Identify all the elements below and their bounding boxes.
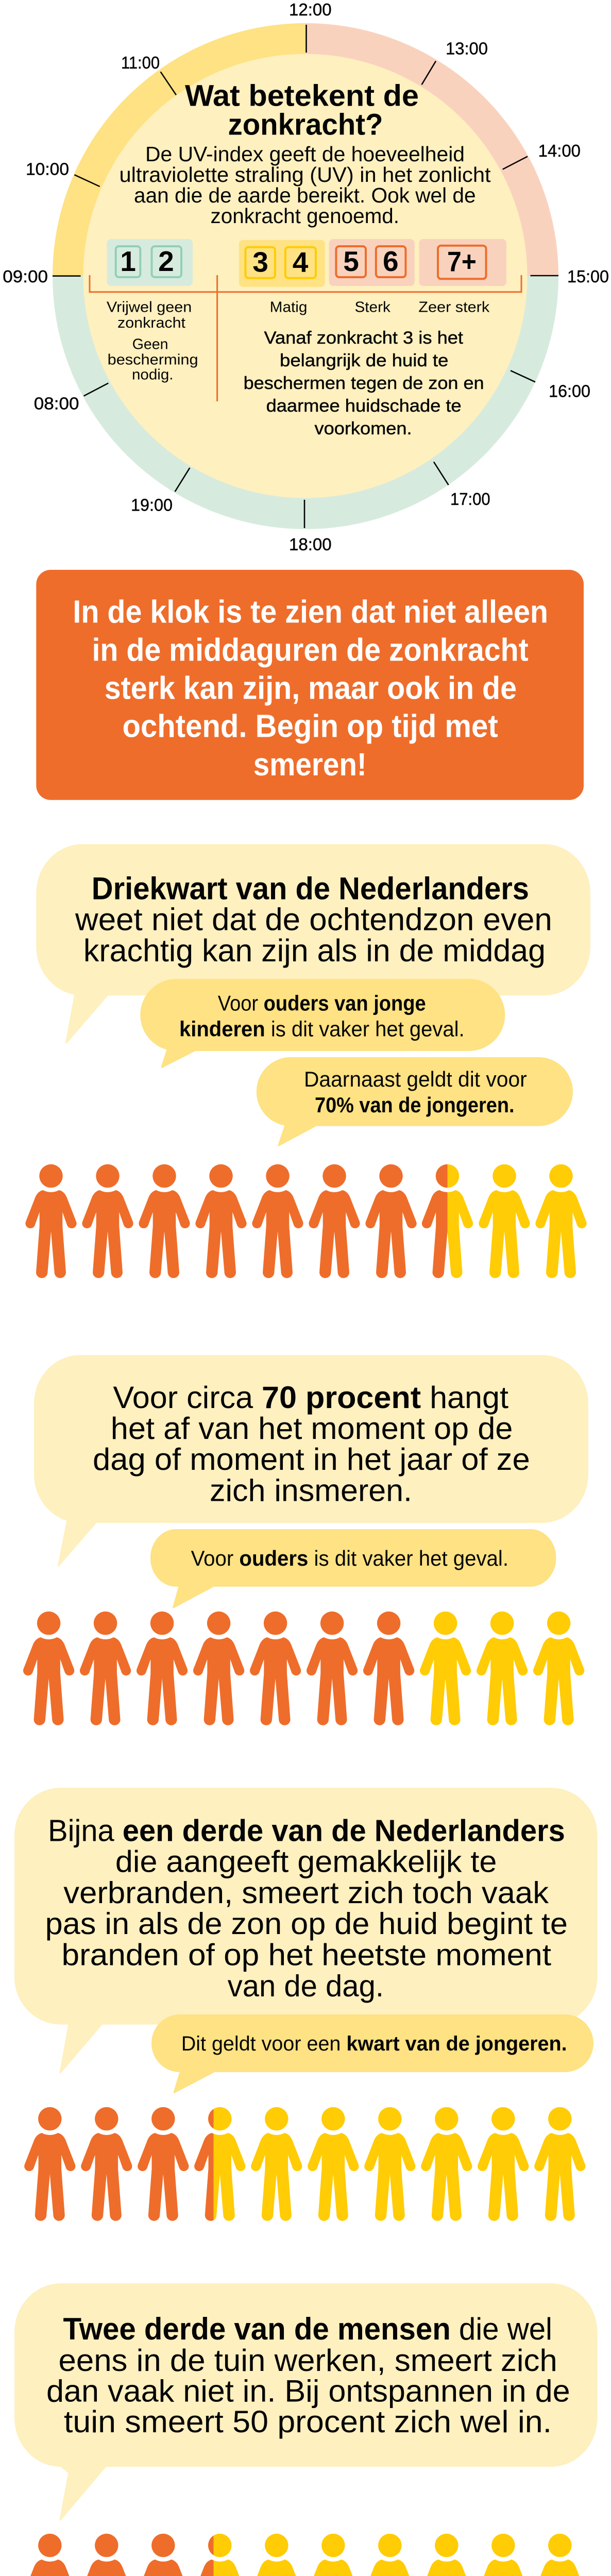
scale label: no protection: Geen [132,336,168,352]
UV scale: strong 5-6: 5 [343,245,359,277]
protection advice: daarmee huidschade te [266,396,462,416]
UV scale: moderate 3-4 [239,240,325,287]
protection advice: Vanaf zonkracht 3 is het [264,328,464,348]
speech bubble: gemakkelijk verbranden: branden of op het heetste moment [62,1938,551,1972]
speech bubble: moment op de dag [34,1355,588,1566]
speech bubble: kwart van de jongeren [151,2014,593,2093]
section 4: tuin [14,2283,598,2576]
hour labels: 19:00 [131,495,173,514]
hour labels: 18:00 [289,535,332,554]
clock ring: morning segment [53,23,306,276]
hour labels: 15:00 [567,267,609,286]
scale labels: moderate, strong, very strong: Matig [270,299,307,315]
speech bubble: gemakkelijk verbranden: die aangeeft gemakkelijk te [115,1845,497,1879]
UV scale: moderate 3-4: 3 [252,246,268,278]
UV scale: very strong 7+: 7+ [447,246,477,278]
UV scale: low 1-2: 2 [158,245,174,277]
speech bubble: ouders [150,1529,556,1607]
people row: 75 percent [25,1164,587,1278]
UV index explanation [120,142,491,228]
scale label: no protection: bescherming [108,351,198,368]
section 1: morning sun awareness [25,844,590,1278]
protection advice: belangrijk de huid te [280,351,448,370]
speech bubble: driekwart [36,844,590,1043]
orange callout: in de middaguren de zonkracht [92,633,529,668]
scale label: no protection [107,299,198,383]
section 3: een derde [14,1788,598,2221]
speech bubble: ouders van jonge kinderen [140,979,505,1067]
speech bubble: gemakkelijk verbranden: pas in als de zon op de huid begint te [45,1907,568,1941]
scale label: no protection: nodig. [132,367,173,383]
speech bubble: ouders van jonge kinderen: Voor ouders van jonge [218,991,426,1015]
clock heading: zonkracht? [228,108,383,141]
speech bubble: moment op de dag: Voor circa 70 procent hangt [113,1380,508,1415]
hour labels: 17:00 [450,489,490,509]
clock heading: Wat betekent de [185,79,419,113]
speech bubble: driekwart: krachtig kan zijn als in de middag [83,933,546,968]
UV index explanation: De UV-index geeft de hoeveelheid [145,142,465,166]
UV index explanation: ultraviolette straling (UV) in het zonlicht [120,163,491,187]
hour labels: 16:00 [549,382,590,401]
speech bubble: twee derde [14,2283,598,2520]
protection advice: voorkomen. [314,419,412,438]
clock ring: low UV segment [53,276,558,529]
speech bubble: twee derde: eens in de tuin werken, smeert zich [59,2343,557,2378]
speech bubble: moment op de dag: het af van het moment op de [111,1411,513,1446]
UV scale: very strong 7+ [419,239,506,286]
hour labels [3,0,609,554]
UV scale: strong 5-6: 6 [383,245,399,277]
speech bubble: gemakkelijk verbranden [14,1788,598,2073]
clock heading [185,79,419,141]
clock: UV index by hour [3,0,609,554]
scale labels: moderate, strong, very strong [270,299,490,315]
clock face [83,54,528,498]
UV scale: low 1-2: 1 [120,245,136,277]
orange callout: smeren! [253,747,367,783]
speech bubble: twee derde: tuin smeert 50 procent zich wel in. [64,2404,552,2439]
orange callout [36,570,584,800]
speech bubble: twee derde: Twee derde van de mensen die wel [63,2312,552,2346]
hour labels: 12:00 [289,0,332,19]
orange callout: ochtend. Begin op tijd met [123,709,498,744]
people row: two thirds garden [24,2534,585,2576]
speech bubble: ouders: Voor ouders is dit vaker het geval. [191,1546,508,1570]
orange callout: sterk kan zijn, maar ook in de [105,671,517,706]
speech bubble: 70% van de jongeren: Daarnaast geldt dit voor [304,1067,527,1091]
people row: 70 percent [23,1612,584,1725]
people row: one third [24,2107,585,2221]
speech bubble: moment op de dag: dag of moment in het jaar of ze [93,1442,530,1477]
orange callout: In de klok is te zien dat niet alleen [73,595,548,630]
hour ticks [53,25,558,528]
hour labels: 11:00 [121,53,160,72]
speech bubble: driekwart: weet niet dat de ochtendzon even [75,902,552,937]
scale label: no protection: Vrijwel geen [107,299,192,315]
speech bubble: driekwart: Driekwart van de Nederlanders [92,871,529,906]
speech bubble: gemakkelijk verbranden: van de dag. [228,1969,384,2003]
section 2: 70 procent [23,1355,588,1725]
hour labels: 09:00 [3,267,48,286]
speech bubble: 70% van de jongeren [257,1057,573,1145]
hour labels: 14:00 [538,141,581,160]
scale bracket [90,275,521,401]
speech bubble: 70% van de jongeren: 70% van de jongeren. [315,1093,514,1117]
speech bubble: gemakkelijk verbranden: Bijna een derde van de Nederlanders [48,1814,565,1848]
UV scale: low 1-2 [107,239,193,286]
hour labels: 08:00 [34,394,79,413]
UV scale: strong 5-6 [329,239,415,286]
hour labels: 10:00 [26,159,69,178]
speech bubble: ouders van jonge kinderen: kinderen is dit vaker het geval. [179,1017,465,1041]
protection advice: beschermen tegen de zon en [244,374,484,393]
scale label: no protection: zonkracht [117,315,185,331]
clock ring: midday segment [306,23,558,276]
hour labels: 13:00 [446,39,488,58]
scale labels: moderate, strong, very strong: Zeer sterk [418,299,490,315]
speech bubble: moment op de dag: zich insmeren. [210,1473,412,1507]
UV index explanation: aan die de aarde bereikt. Ook wel de [134,183,476,207]
speech bubble: kwart van de jongeren: Dit geldt voor een kwart van de jongeren. [181,2032,567,2055]
UV scale: moderate 3-4: 4 [293,246,309,278]
UV index explanation: zonkracht genoemd. [210,204,399,228]
protection advice [244,328,484,438]
scale labels: moderate, strong, very strong: Sterk [354,299,391,315]
speech bubble: gemakkelijk verbranden: verbranden, smeert zich toch vaak [63,1876,549,1910]
speech bubble: twee derde: dan vaak niet in. Bij ontspannen in de [46,2374,570,2409]
